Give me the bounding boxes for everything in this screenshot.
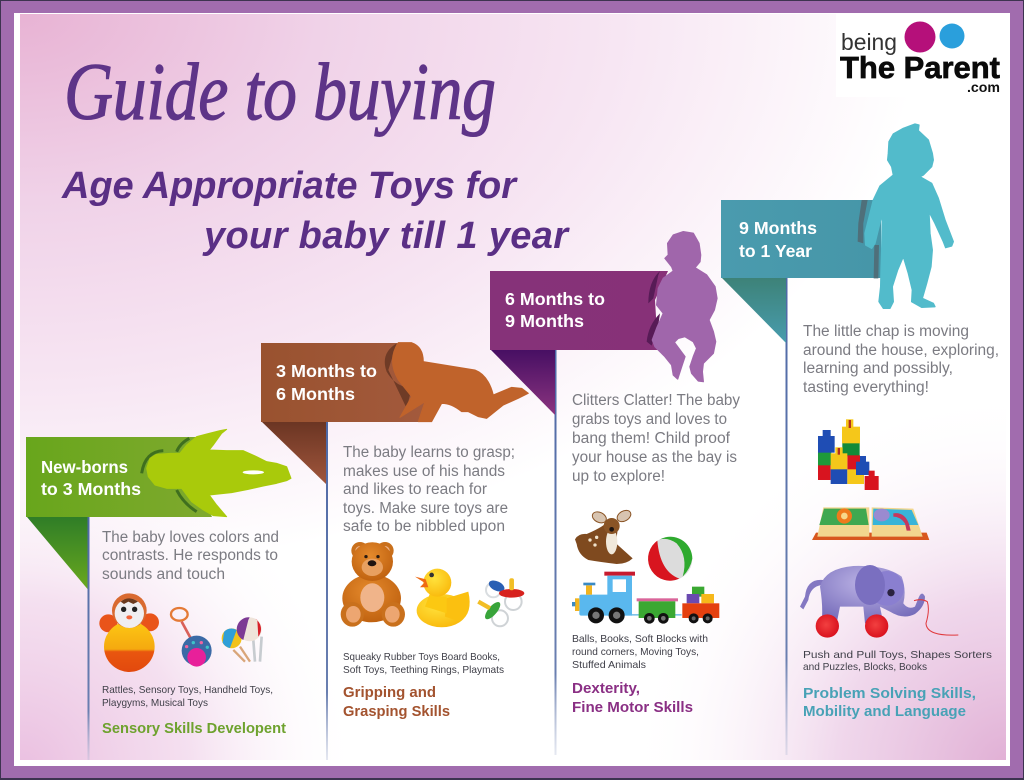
panel: 6 to 9 months xyxy=(490,232,740,716)
description: your house as the bay is xyxy=(572,449,737,466)
panel: 3 to 6 months xyxy=(261,343,528,720)
toy list: Rattles, Sensory Toys, Handheld Toys, xyxy=(102,685,273,696)
age label: to 1 Year xyxy=(739,241,812,261)
age label: 6 Months xyxy=(276,384,355,404)
ribbon fold xyxy=(722,278,786,343)
toy list: round corners, Moving Toys, xyxy=(572,647,699,658)
title xyxy=(61,47,570,257)
description: toys. Make sure toys are xyxy=(343,500,508,517)
description: learning and possibly, xyxy=(803,360,953,377)
skill heading: Grasping Skills xyxy=(343,703,450,720)
description: The baby loves colors and xyxy=(102,529,279,546)
ribbon xyxy=(721,200,881,278)
age label xyxy=(41,457,141,499)
age label xyxy=(505,289,605,331)
title: Age Appropriate Toys for xyxy=(61,165,518,207)
skill heading xyxy=(572,680,693,716)
description: and likes to reach for xyxy=(343,481,487,498)
description xyxy=(572,392,740,485)
icon: pull-along elephant xyxy=(800,565,958,638)
description: bang them! Child proof xyxy=(572,430,731,447)
skill heading xyxy=(803,685,976,720)
icon: maracas xyxy=(222,617,262,662)
icon: picture book xyxy=(812,507,929,540)
toy list xyxy=(572,634,708,671)
baby silhouette xyxy=(647,232,717,382)
icon: rubber duck xyxy=(415,569,470,627)
skill heading: Mobility and Language xyxy=(803,703,966,720)
description: safe to be nibbled upon xyxy=(343,518,505,535)
age label: 9 Months xyxy=(505,311,584,331)
baby silhouette xyxy=(858,124,953,308)
icon: toy train xyxy=(572,572,719,624)
description: tasting everything! xyxy=(803,379,929,396)
ribbon fold xyxy=(262,422,326,484)
title: Guide to buying xyxy=(64,47,496,137)
icon: roly-poly doll xyxy=(99,593,159,672)
description xyxy=(102,529,279,583)
ribbon fold xyxy=(27,517,88,589)
toy list xyxy=(803,650,992,673)
skill heading xyxy=(343,684,450,720)
skill heading: Problem Solving Skills, xyxy=(803,685,976,702)
ribbon fold xyxy=(491,350,555,415)
logo: The Parent xyxy=(840,50,1000,85)
logo: .com xyxy=(967,79,1000,95)
description: Clitters Clatter! The baby xyxy=(572,392,740,409)
logo xyxy=(836,14,1006,97)
skill heading: Fine Motor Skills xyxy=(572,699,693,716)
icon: pacifiers xyxy=(478,578,524,626)
description: contrasts. He responds to xyxy=(102,547,278,564)
skill heading: Gripping and xyxy=(343,684,436,701)
ribbon xyxy=(26,437,212,517)
panel: 9 months to 1 year xyxy=(721,124,999,720)
icon: stuffed deer xyxy=(575,508,633,564)
age label: New-borns xyxy=(41,457,128,477)
logo: being xyxy=(841,29,897,55)
icon: beach ball xyxy=(648,537,692,581)
baby silhouette xyxy=(385,343,528,422)
description: up to explore! xyxy=(572,468,665,485)
toy list: Push and Pull Toys, Shapes Sorters xyxy=(803,650,992,661)
toy list xyxy=(343,652,504,676)
age label xyxy=(276,361,377,404)
description: The baby learns to grasp; xyxy=(343,444,515,461)
icon: ring rattle xyxy=(171,608,212,667)
age label: 9 Months xyxy=(739,218,817,238)
description: grabs toys and loves to xyxy=(572,411,727,428)
description: around the house, exploring, xyxy=(803,342,999,359)
icon: stacking blocks xyxy=(818,419,879,490)
toy list: Squeaky Rubber Toys Board Books, xyxy=(343,652,500,663)
description xyxy=(343,444,515,535)
column dividers xyxy=(88,278,788,760)
description xyxy=(803,323,999,396)
toy list: Soft Toys, Teething Rings, Playmats xyxy=(343,665,504,676)
description: makes use of his hands xyxy=(343,463,505,480)
ribbon xyxy=(490,271,668,350)
age label: to 3 Months xyxy=(41,479,141,499)
ribbon xyxy=(261,343,432,422)
toy list: and Puzzles, Blocks, Books xyxy=(803,662,927,673)
skill heading: Dexterity, xyxy=(572,680,640,697)
age label xyxy=(739,218,817,261)
toy list: Stuffed Animals xyxy=(572,660,646,671)
toy list xyxy=(102,685,273,709)
skill heading: Sensory Skills Developent xyxy=(102,720,286,737)
toy list: Balls, Books, Soft Blocks with xyxy=(572,634,708,645)
age label: 6 Months to xyxy=(505,289,605,309)
age label: 3 Months to xyxy=(276,361,377,381)
description: sounds and touch xyxy=(102,566,225,583)
baby silhouette xyxy=(142,429,291,517)
description: The little chap is moving xyxy=(803,323,969,340)
toy list: Playgyms, Musical Toys xyxy=(102,698,208,709)
title: your baby till 1 year xyxy=(202,215,570,257)
panel: new-borns to 3 months xyxy=(26,429,291,737)
icon: teddy bear xyxy=(341,542,405,627)
